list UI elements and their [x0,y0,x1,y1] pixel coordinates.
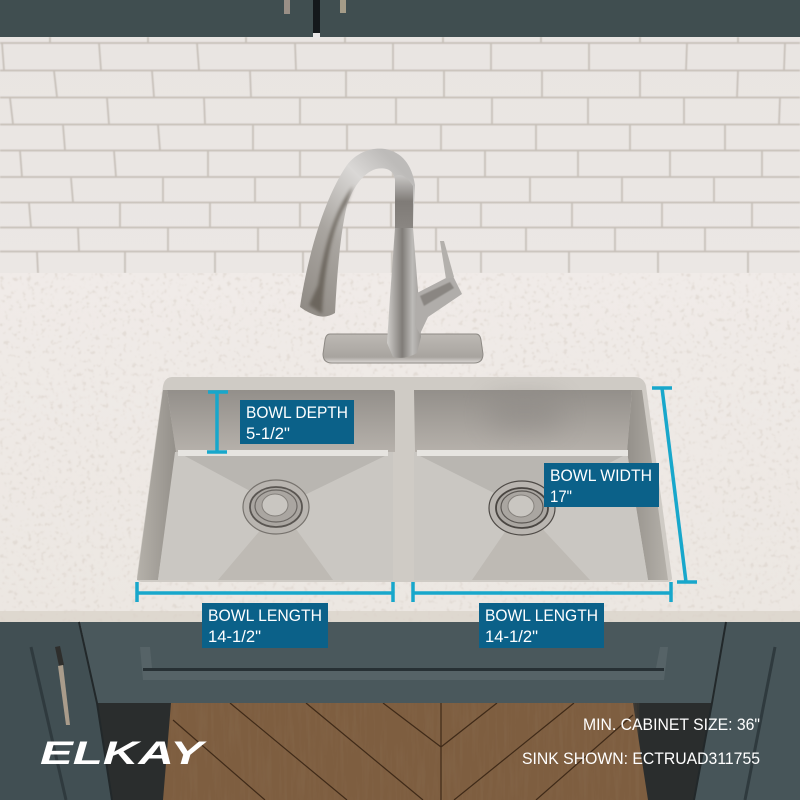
sink [137,377,672,582]
sink model note: SINK SHOWN: ECTRUAD311755 [522,749,760,768]
left bowl [137,390,395,580]
upper cabinets [0,0,800,38]
right door [694,622,800,800]
label: right bowl length [479,603,604,648]
faucet neck sleeve [395,175,413,228]
label: bowl width: 17" [550,487,572,506]
deck plate [323,334,483,363]
right drain [489,481,555,535]
dark kick space [90,700,720,800]
handle shadow [420,282,454,306]
wood chevron floor [163,703,648,800]
quartz countertop [0,273,800,622]
label: left bowl length [202,603,328,648]
label: bowl depth [240,400,354,444]
right bowl [414,390,668,580]
label: right bowl length: BOWL LENGTH [485,606,598,625]
minimum cabinet size note: MIN. CABINET SIZE: 36" [583,715,760,734]
faucet handle [415,276,462,334]
label: bowl depth: 5-1/2" [246,424,290,443]
faucet lever [440,241,454,279]
base cabinets and floor [0,622,800,800]
wall: subway tile backsplash [0,37,800,277]
sink rim [137,377,672,582]
spout dark reflection [309,186,353,314]
bowl depth line [207,392,228,452]
faucet [300,149,483,363]
label: bowl width: BOWL WIDTH [550,466,652,485]
left bowl length line [137,582,393,602]
label: bowl width [544,463,659,507]
left drain [243,480,309,534]
dimension lines [137,388,697,602]
sink front panel [80,622,726,703]
gooseneck spout [300,149,415,317]
drawer recess [140,647,668,680]
label: left bowl length: BOWL LENGTH [208,606,322,625]
right bowl length line [413,582,671,602]
door groove right [745,647,775,800]
faucet body [387,228,421,358]
bowl width line [652,388,697,582]
label: left bowl length: 14-1/2" [208,627,261,646]
door handle [55,646,70,725]
logo: Elkay: ELKAY [40,735,207,771]
label: right bowl length: 14-1/2" [485,627,538,646]
left door [0,622,112,800]
door groove left [31,647,66,800]
label: bowl depth: BOWL DEPTH [246,403,348,422]
